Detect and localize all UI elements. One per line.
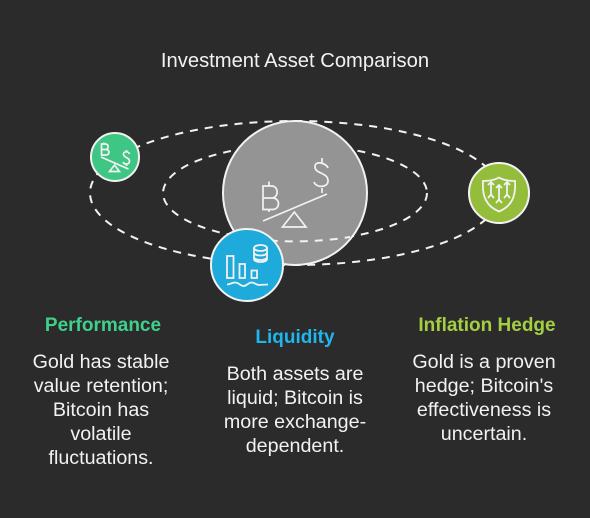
title: Investment Asset Comparison [161,50,429,72]
text: inflation hedge: effectiveness is [417,399,551,421]
central grey circle with scale icon [223,121,367,265]
text: inflation hedge: hedge; Bitcoin's [415,375,553,397]
inner orbit front arc over grey circle [240,237,350,241]
text: inflation hedge [412,351,556,445]
text: inflation hedge: Gold is a proven [412,351,556,373]
text: performance: Gold has stable [33,351,169,373]
text: liquidity: more exchange- [224,411,366,433]
performance node: green circle with scale icon [91,133,139,181]
inner dashed orbit [163,145,427,241]
text: performance: volatile [70,423,132,445]
text: performance [33,351,169,469]
text: liquidity [224,363,366,457]
text: performance: fluctuations. [48,447,154,469]
text: liquidity: dependent. [246,435,344,457]
text: inflation hedge: uncertain. [441,423,527,445]
text: liquidity: Both assets are [227,363,363,385]
inflation hedge node: lime circle with shield icon [469,163,529,223]
heading: liquidity: Liquidity [255,327,335,348]
heading: inflation hedge: Inflation Hedge [418,315,556,336]
outer dashed orbit [90,121,500,265]
text: performance: Bitcoin has [53,399,149,421]
liquidity node: blue circle with chart icon [211,229,283,301]
text: performance: value retention; [34,375,168,397]
text: liquidity: liquid; Bitcoin is [227,387,363,409]
heading: performance: Performance [45,315,161,336]
